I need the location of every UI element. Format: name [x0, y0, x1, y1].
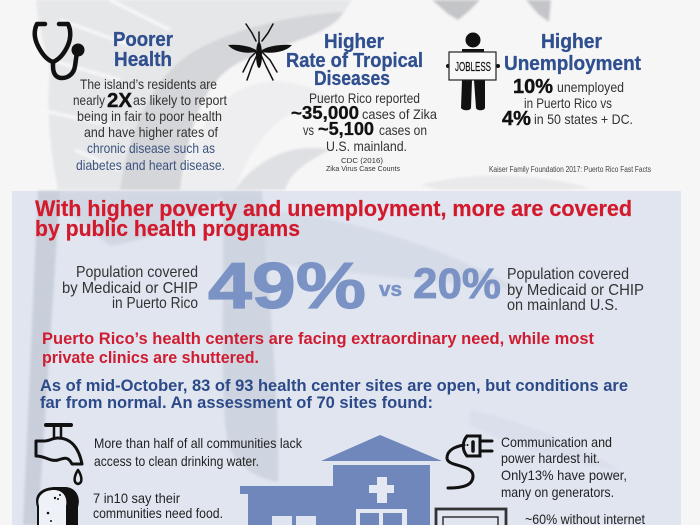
text: poorer health body: being in fair to poor health — [77, 108, 222, 124]
text: tropical diseases body: CDC (2016) — [341, 156, 384, 165]
heading: public programs — [35, 196, 632, 241]
text: food: communities need food. — [93, 505, 223, 521]
text: left population label — [62, 264, 198, 312]
heading: health centers need — [42, 330, 594, 367]
text: food: 7 in10 say their — [93, 490, 180, 506]
text: tropical diseases body: ~35,000 — [291, 103, 359, 123]
text: poorer health body: as likely to report — [133, 92, 227, 108]
heading: tropical diseases: Diseases — [314, 68, 390, 90]
text: unemployment body: 10% — [513, 76, 553, 98]
text: poorer health body: diabetes and heart disease. — [76, 157, 225, 173]
stat: 49 percent vs 20 percent: vs — [379, 279, 402, 301]
text: left population label: in Puerto Rico — [112, 295, 198, 312]
panel: public coverage background — [12, 191, 681, 525]
heading: tropical diseases — [286, 31, 423, 90]
heading: health centers need: private clinics are shuttered. — [42, 349, 259, 367]
text: tropical diseases body: vs — [303, 122, 314, 138]
heading: higher unemployment: Unemployment — [504, 52, 641, 75]
text: poorer health body: nearly — [73, 92, 105, 108]
text: poorer health body: and have higher rates of — [84, 124, 218, 140]
text: unemployment body — [502, 76, 633, 130]
heading: poorer health: Poorer — [113, 29, 173, 51]
stat: 49 percent vs 20 percent: 49% — [208, 249, 366, 322]
text: right population label: by Medicaid or CHIP — [507, 282, 644, 299]
text: tropical diseases body: cases of Zika — [362, 106, 437, 122]
text: power: Only13% have power, — [501, 467, 627, 483]
heading: assessment: far from normal. An assessment of 70 sites found: — [40, 394, 433, 412]
heading: tropical diseases: Higher — [324, 31, 384, 53]
stat: 49 percent vs 20 percent — [208, 249, 501, 322]
text: food — [93, 490, 223, 521]
text: poorer health body — [73, 76, 227, 173]
heading: tropical diseases: Rate of Tropical — [286, 50, 423, 72]
text: unemployment body: in Puerto Rico vs — [524, 95, 612, 111]
text: right population label: Population covered — [507, 266, 629, 283]
text: right population label: on mainland U.S. — [507, 297, 618, 314]
heading: higher unemployment: Higher — [541, 31, 602, 53]
text: right population label — [507, 266, 644, 314]
heading: higher unemployment — [504, 31, 641, 75]
heading: public programs: by public health programs — [35, 216, 300, 241]
text: power: Communication and — [501, 434, 612, 450]
text: unemployment body: unemployed — [557, 79, 624, 95]
text: water: More than half of all communities lack — [94, 435, 303, 451]
text: unemployment body: in 50 states + DC. — [534, 111, 633, 127]
text: poorer health body: chronic disease such as — [87, 140, 215, 156]
text: left population label: by Medicaid or CHIP — [62, 280, 198, 297]
text: tropical diseases body — [291, 90, 437, 173]
heading: assessment: As of mid-October, 83 of 93 health center sites are open, but conditions are — [40, 377, 628, 395]
heading: poorer health — [113, 29, 173, 71]
heading: assessment — [40, 377, 628, 412]
icon: bread — [36, 487, 79, 525]
text: power: power hardest hit. — [501, 450, 600, 466]
icon: monitor — [436, 509, 506, 525]
text: tropical diseases body: ~5,100 — [318, 119, 374, 139]
text: tropical diseases body: Puerto Rico reported — [309, 90, 420, 106]
text: power: many on generators. — [501, 484, 614, 500]
text: power — [501, 434, 627, 500]
icon: faucet — [36, 425, 82, 484]
text: tropical diseases body: U.S. mainland. — [326, 138, 407, 154]
text: tropical diseases body: cases on — [379, 122, 427, 138]
palm shadows in panel — [23, 191, 620, 525]
text: water: access to clean drinking water. — [94, 453, 259, 469]
icon: jobless sign person — [446, 32, 500, 110]
icon: mosquito — [228, 24, 292, 80]
source note: Kaiser Family Foundation 2017: Puerto Rico Fast Facts — [489, 165, 651, 174]
icon: health center building — [240, 435, 442, 525]
text: unemployment body: 4% — [502, 108, 531, 130]
text: tropical diseases body: Zika Virus Case Counts — [326, 164, 400, 173]
text: poorer health body: The island’s residents are — [80, 76, 217, 92]
icon: plug — [447, 436, 492, 488]
heading: health centers need: Puerto Rico’s health centers are facing extraordinary need, while most — [42, 330, 594, 348]
heading: poorer health: Health — [114, 49, 172, 71]
icon: stethoscope — [35, 24, 84, 78]
text: water — [94, 435, 303, 469]
stat: 49 percent vs 20 percent: 20% — [413, 260, 501, 308]
text: left population label: Population covered — [76, 264, 198, 281]
icon: jobless sign person: JOBLESS — [455, 59, 491, 74]
text: poorer health body: 2X — [107, 90, 133, 112]
heading: public programs: With higher poverty and unemployment, more are covered — [35, 196, 632, 221]
